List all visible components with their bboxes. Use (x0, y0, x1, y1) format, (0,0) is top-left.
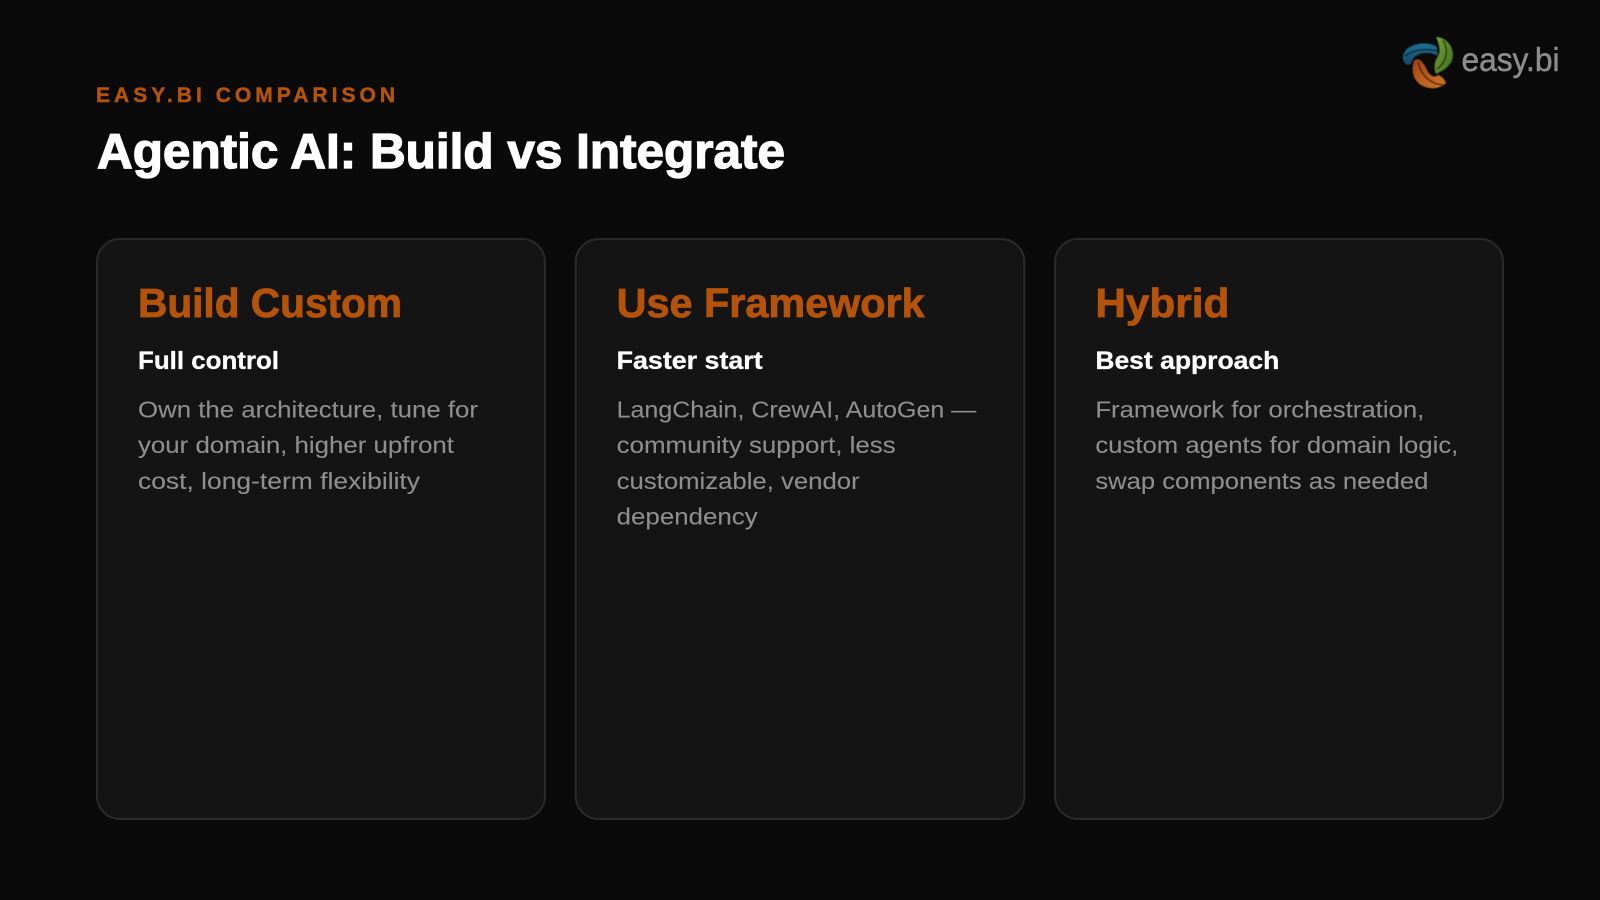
body text (617, 396, 977, 530)
heading: Use Framework: Use Framework (617, 280, 925, 326)
subheading: Best approach: Best approach (1095, 347, 1279, 375)
body text: LangChain, CrewAI, AutoGen — (617, 396, 977, 422)
panel: Hybrid (1055, 239, 1503, 819)
logo: easy.bi (1403, 37, 1560, 88)
icon: swirl mark (1403, 37, 1453, 88)
body text: custom agents for domain logic, (1095, 432, 1458, 458)
body text: swap components as needed (1095, 468, 1428, 494)
heading: Build Custom: Build Custom (138, 280, 402, 326)
body text: your domain, higher upfront (138, 432, 455, 458)
eyebrow: EASY.BI COMPARISON (96, 84, 395, 107)
body text: Own the architecture, tune for (138, 396, 478, 422)
logo wordmark: easy.bi (1462, 41, 1560, 78)
heading: Hybrid: Hybrid (1095, 280, 1229, 326)
panel: Use Framework (576, 239, 1024, 819)
body text: community support, less (617, 432, 896, 458)
panel: Build Custom (97, 239, 545, 819)
title: Agentic AI: Build vs Integrate (97, 125, 785, 179)
body text: cost, long-term flexibility (138, 468, 420, 494)
body text (1095, 396, 1458, 494)
subheading: Faster start: Faster start (617, 347, 763, 375)
subheading: Full control: Full control (138, 347, 279, 375)
body text: dependency (617, 504, 758, 530)
body text: customizable, vendor (617, 468, 860, 494)
body text (138, 396, 478, 494)
body text: Framework for orchestration, (1095, 396, 1424, 422)
